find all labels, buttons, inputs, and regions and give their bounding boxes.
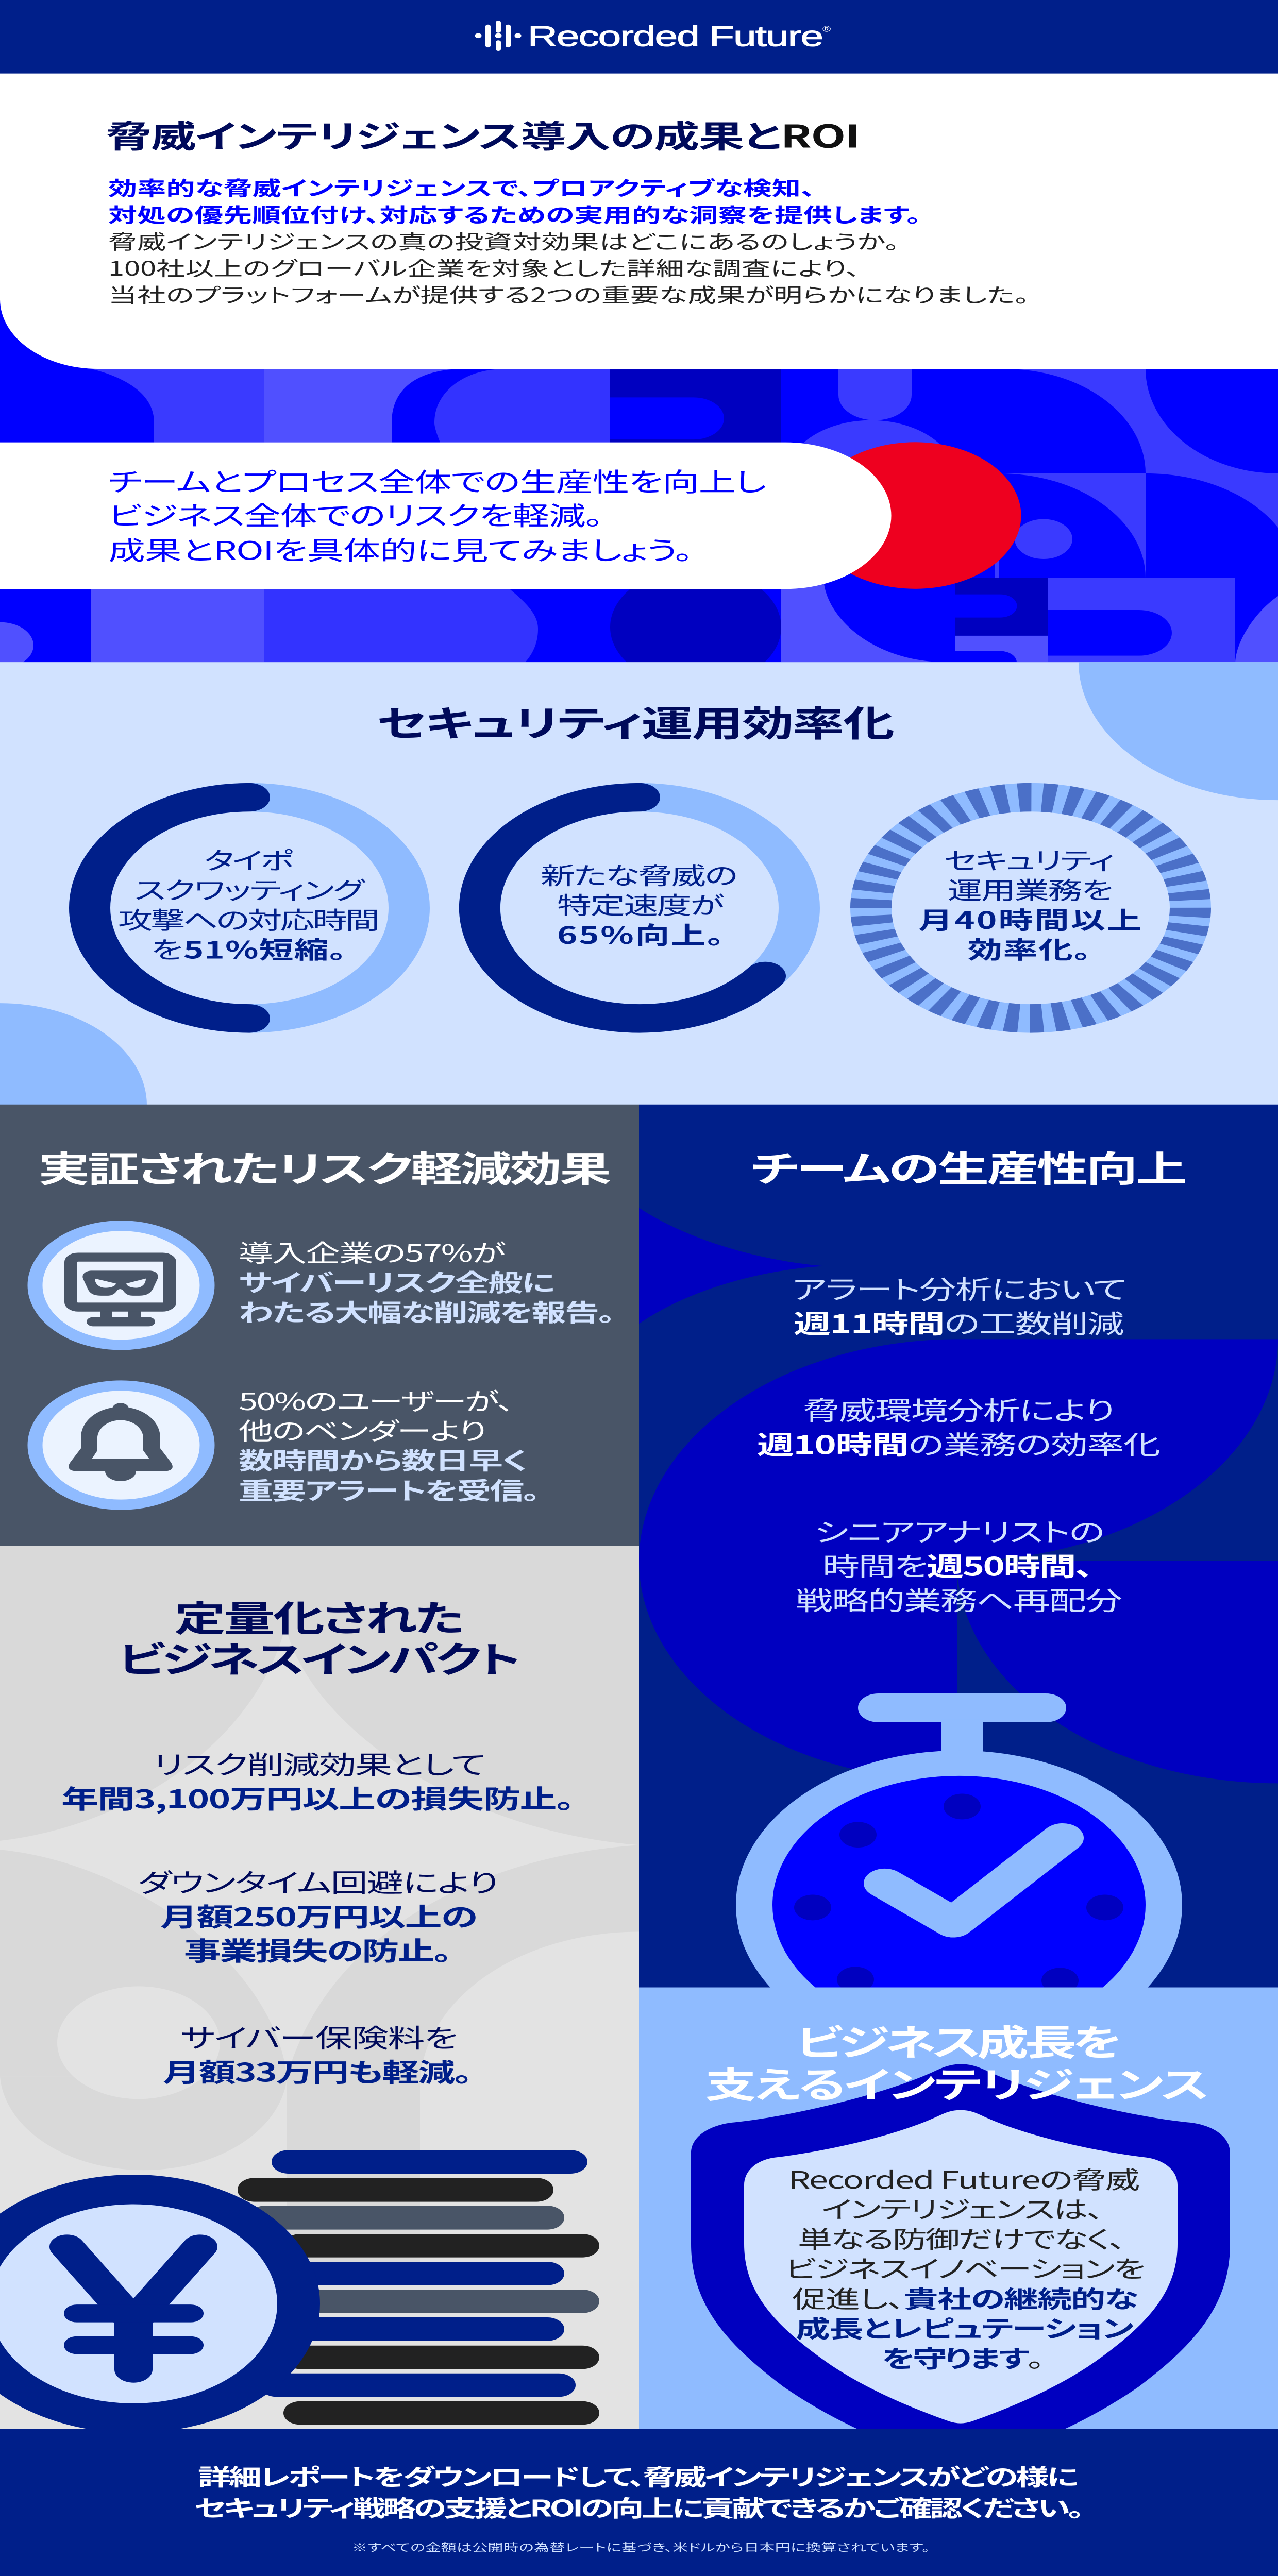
- heading: [705, 2014, 1209, 2108]
- text block: 11 hours: アラート分析において: [792, 1269, 1127, 1307]
- callout: white pill: ビジネス全体でのリスクを軽減。: [108, 495, 603, 533]
- text block: 50 hours: [796, 1512, 1122, 1617]
- text block: 57%: 導入企業の57%が: [239, 1234, 506, 1269]
- text block: shield copy: 成長とレピュテーション: [796, 2310, 1134, 2344]
- heading: チームの生産性向上: [751, 1140, 1187, 1192]
- heading: 実証されたリスク軽減効果: [38, 1140, 611, 1192]
- chart: ring 65%: 特定速度が: [557, 886, 724, 921]
- icon: stopwatch with check: [754, 1693, 1164, 2047]
- callout: white pill: 成果とROIを具体的に見てみましょう。: [108, 530, 693, 567]
- chart: ring 51%: [90, 798, 409, 1019]
- chart: ring 65%: 65%向上。: [557, 916, 724, 951]
- heading: ビジネスインパクト: [118, 1631, 521, 1683]
- panel: security operations efficiency: [0, 662, 1278, 1105]
- heading: ビジネス成長を: [796, 2014, 1122, 2066]
- text block: annual loss: [61, 1744, 575, 1816]
- chart: ring 65%: 新たな脅威の: [541, 857, 738, 891]
- text block: intro copy: 100社以上のグローバル企業を対象とした詳細な調査により、: [108, 252, 860, 282]
- banner: geometric pattern with pill and red circle: [0, 296, 1278, 686]
- text block: 11 hours: 週11時間の工数削減: [794, 1303, 1124, 1341]
- text block: downtime: [138, 1862, 499, 1968]
- footnote: ※すべての金額は公開時の為替レートに基づき、米ドルから日本円に換算されています。: [352, 2539, 930, 2555]
- chart: striped ring 40 hours: セキュリティ: [944, 841, 1115, 876]
- chart: ring 51%: を51%短縮。: [151, 931, 346, 965]
- icon: yen coin: [0, 2190, 299, 2418]
- text block: 50 hours: 時間を週50時間、: [822, 1546, 1094, 1583]
- logo registered mark: ®: [822, 25, 831, 34]
- panel: team productivity: [639, 1105, 1278, 2047]
- icon: monitor with mask: [35, 1226, 207, 1345]
- panel: quantified business impact: [0, 1546, 639, 2429]
- text block: 50 hours: 戦略的業務へ再配分: [796, 1580, 1122, 1617]
- chart: striped ring 40 hours: 運用業務を: [948, 871, 1113, 906]
- text block: annual loss: 年間3,100万円以上の損失防止。: [61, 1778, 575, 1816]
- text block: 50%: 50%のユーザーが、: [239, 1382, 514, 1417]
- text block: insurance: サイバー保険料を: [180, 2018, 458, 2055]
- chart: striped ring 40 hours: [871, 798, 1190, 1019]
- text block: intro copy: 対処の優先順位付け、対応するための実用的な洞察を提供します。: [108, 199, 921, 228]
- chart: ring 65%: [480, 798, 799, 1019]
- text block: 10 hours: 週10時間の業務の効率化: [757, 1424, 1161, 1462]
- text block: downtime: 事業損失の防止。: [184, 1930, 452, 1968]
- icon: shield: [691, 2064, 1230, 2463]
- text block: 11 hours: [792, 1269, 1127, 1341]
- text block: call to action: セキュリティ戦略の支援とROIの向上に貢献できるかご確認ください。: [194, 2490, 1084, 2523]
- heading: 定量化された: [174, 1589, 464, 1641]
- text block: shield copy: Recorded Futureの脅威: [788, 2161, 1140, 2196]
- heading: 支えるインテリジェンス: [705, 2056, 1209, 2108]
- chart: ring 51%: タイポ: [204, 841, 294, 876]
- text block: 50 hours: シニアアナリストの: [814, 1512, 1105, 1549]
- panel: footer: [0, 2429, 1278, 2576]
- heading: セキュリティ運用効率化: [377, 695, 895, 747]
- logo wordmark: Recorded Future: [528, 20, 823, 52]
- text block: 10 hours: 脅威環境分析により: [803, 1390, 1115, 1427]
- text block: shield copy: 促進し、貴社の継続的な: [792, 2280, 1138, 2315]
- text block: 50%: 重要アラートを受信。: [239, 1471, 540, 1506]
- text block: 57%: サイバーリスク全般に: [239, 1264, 555, 1298]
- chart: ring 51%: 攻撃への対応時間: [118, 901, 380, 936]
- chart: ring 51%: スクワッティング: [134, 871, 366, 906]
- chart: striped ring 40 hours: 効率化。: [968, 931, 1091, 965]
- icon: Recorded Future logo mark: [475, 21, 522, 51]
- heading: [118, 1589, 521, 1683]
- chart: striped ring 40 hours: 月40時間以上: [918, 901, 1141, 936]
- text block: 57%: わたる大幅な削減を報告。: [239, 1294, 615, 1328]
- title: 脅威インテリジェンス導入の成果とROI: [106, 111, 860, 157]
- text block: 50%: 数時間から数日早く: [239, 1442, 528, 1477]
- text block: call to action: 詳細レポートをダウンロードして、脅威インテリジェンスがどの様に: [198, 2459, 1079, 2492]
- text block: 50%: [239, 1382, 540, 1506]
- text block: 57%: [239, 1234, 615, 1328]
- text block: annual loss: リスク削減効果として: [153, 1744, 486, 1782]
- text block: 10 hours: [757, 1390, 1161, 1462]
- text block: call to action: [194, 2459, 1084, 2523]
- text block: shield copy: [785, 2161, 1146, 2375]
- callout: white pill: [0, 443, 892, 589]
- panel: intro: [0, 74, 1278, 369]
- panel: header bar with logo: [0, 0, 1278, 74]
- text block: shield copy: インテリジェンスは、: [821, 2191, 1104, 2225]
- text block: shield copy: 単なる防御だけでなく、: [798, 2221, 1126, 2255]
- text block: 50%: 他のベンダーより: [239, 1412, 487, 1447]
- text block: intro copy: 当社のプラットフォームが提供する2つの重要な成果が明らかになりました。: [108, 279, 1029, 308]
- callout: white pill: チームとプロセス全体での生産性を向上し: [108, 462, 766, 499]
- text block: intro copy: [108, 172, 1029, 308]
- panel: proven risk reduction: [0, 1105, 639, 1546]
- icon: bell: [35, 1385, 207, 1505]
- text block: downtime: ダウンタイム回避により: [138, 1862, 499, 1900]
- text block: insurance: 月額33万円も軽減。: [163, 2052, 473, 2089]
- panel: intelligence supporting business growth: [639, 1987, 1278, 2463]
- text block: intro copy: 脅威インテリジェンスの真の投資対効果はどこにあるのしょうか。: [108, 226, 899, 255]
- text block: downtime: 月額250万円以上の: [160, 1896, 478, 1934]
- text block: shield copy: ビジネスイノベーションを: [785, 2250, 1146, 2285]
- icon: stacked coins: [238, 2150, 599, 2425]
- text block: insurance: [163, 2018, 473, 2089]
- text block: shield copy: を守ります。: [882, 2340, 1045, 2375]
- icon: red circle: [809, 442, 1021, 589]
- text block: intro copy: 効率的な脅威インテリジェンスで、プロアクティブな検知、: [108, 172, 815, 201]
